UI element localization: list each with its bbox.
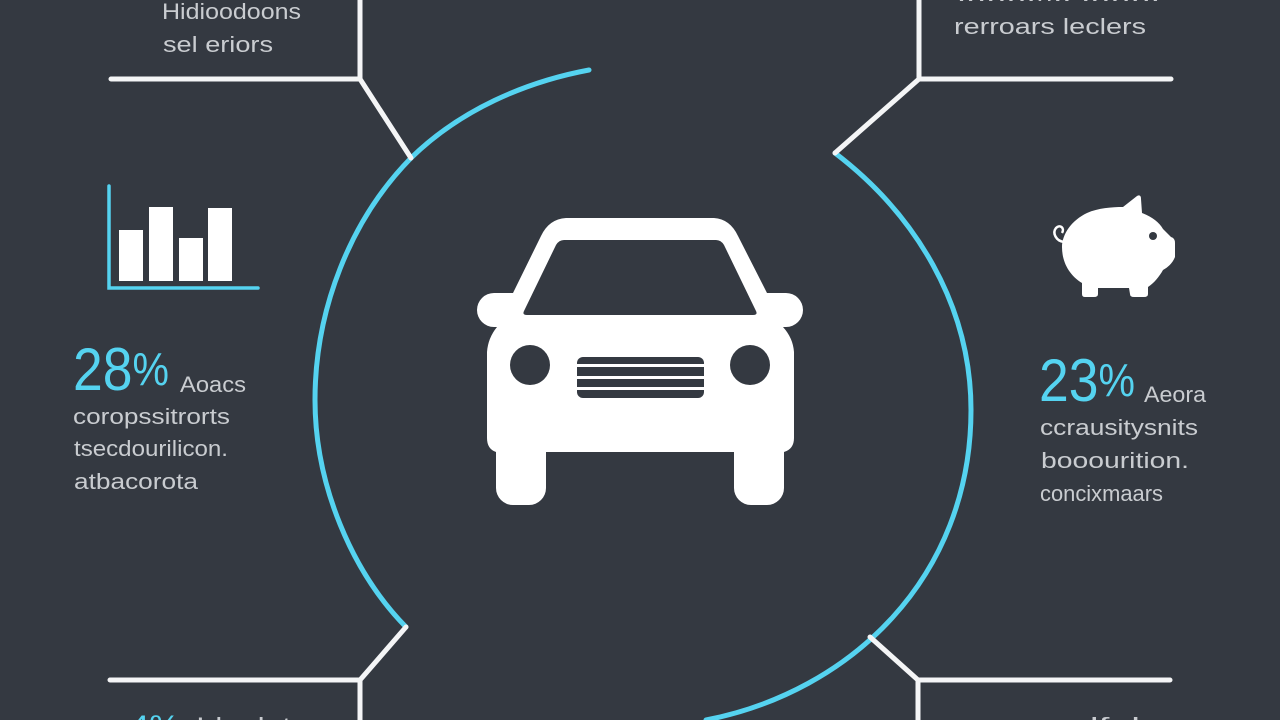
stat: 28%: Aoacs	[180, 372, 246, 397]
stat: 23%: concixmaars	[1040, 481, 1163, 506]
icon: piggy bank	[1054, 195, 1175, 297]
connector: top right	[835, 0, 1171, 153]
headlight: right	[730, 345, 770, 385]
text block: top right	[954, 0, 1161, 39]
stat: 28%: atbacorota	[74, 469, 199, 494]
headlight: left	[510, 345, 550, 385]
arc: right blue ring segment	[706, 153, 971, 720]
piggy eye	[1149, 232, 1157, 240]
stat: 23%: %	[1099, 354, 1135, 406]
stat: 23%: Aeora	[1144, 382, 1207, 407]
text block: top left: sel eriors	[163, 32, 273, 57]
arc: left blue ring segment	[315, 70, 589, 627]
icon: bar chart	[109, 186, 258, 288]
connector: top left	[111, 0, 411, 158]
stat: 23%	[1039, 347, 1207, 506]
icon: central car	[477, 218, 803, 505]
stat: 23%: 23	[1039, 347, 1106, 414]
stat: 28%: coropssitrorts	[73, 404, 230, 429]
piggy tail	[1054, 226, 1064, 242]
stat: 23%: booourition.	[1041, 448, 1189, 473]
text block: top left	[162, 0, 301, 57]
grille	[577, 357, 704, 398]
stat: 28%	[73, 336, 246, 494]
stat: 28%: %	[133, 343, 169, 395]
text block: top right: rerroars leclers	[954, 14, 1146, 39]
stat: 28%: tsecdourilicon.	[74, 436, 228, 461]
connector: bottom left	[110, 627, 406, 720]
stat: 23%: ccrausitysnits	[1040, 415, 1198, 440]
stat: 28%: 28	[73, 336, 140, 403]
connector: bottom right	[870, 637, 1170, 720]
